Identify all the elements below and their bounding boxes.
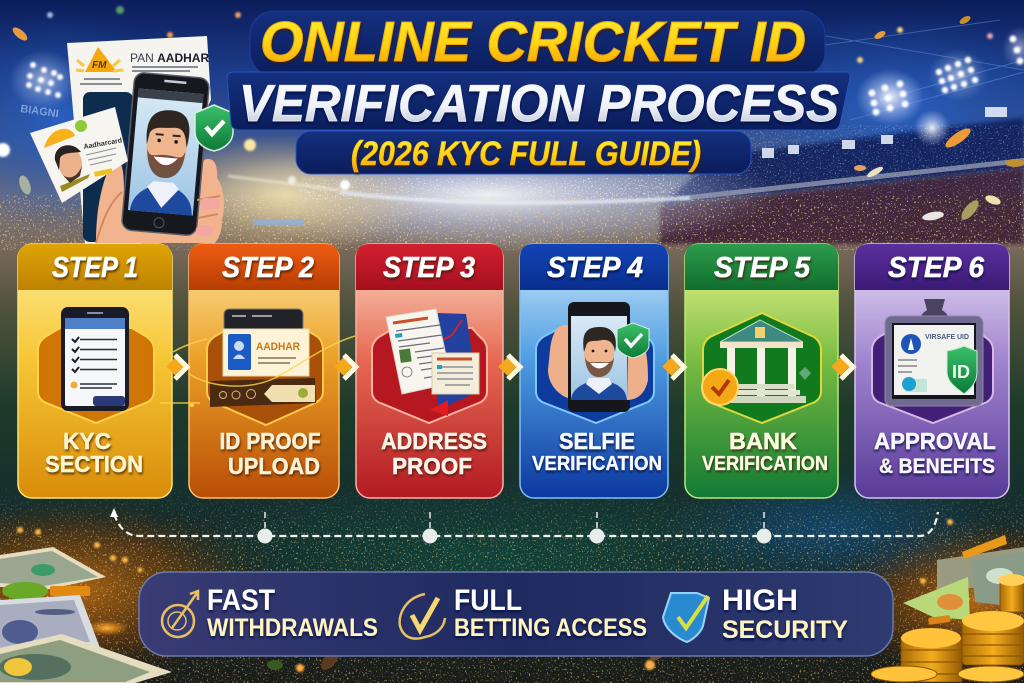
benefit: fast withdrawals: FAST <box>207 584 275 617</box>
panel: step 6 approval and benefits: APPROVAL <box>874 428 996 454</box>
icon: target arrow <box>162 591 198 637</box>
icon: green verified shield <box>195 105 233 151</box>
panel: step 4 selfie verification: VERIFICATION <box>532 453 662 475</box>
arrow: step 4 to 5 <box>662 355 684 379</box>
icon: selfie phone with shield <box>536 302 654 423</box>
arrow: step 5 to 6 <box>831 355 853 379</box>
panel: step 3 address proof: PROOF <box>392 453 472 479</box>
benefit: high security: SECURITY <box>722 616 848 644</box>
gold light streak across cards <box>160 336 355 406</box>
stadium floodlights <box>9 26 1024 125</box>
documents and selfie phone illustration <box>30 36 233 245</box>
title: line one pill: ONLINE CRICKET ID <box>260 10 806 74</box>
icon: check circle <box>400 594 445 639</box>
icon: KYC checklist phone <box>38 307 154 423</box>
arrow: step 1 to 2 <box>166 355 187 379</box>
panel: step 3 address proof: ADDRESS <box>381 428 487 454</box>
arrow: step 2 to 3 <box>334 355 356 379</box>
panel: step 6 approval and benefits: & BENEFITS <box>879 455 995 478</box>
ID card <box>30 107 128 203</box>
benefit: high security: HIGH <box>722 584 798 617</box>
benefit: fast withdrawals: WITHDRAWALS <box>207 614 378 642</box>
icon: hand holding phone <box>96 72 224 243</box>
icon: Aadhar card upload: AADHAR <box>256 341 300 353</box>
sign text in stadium: BIAGNI <box>20 103 59 120</box>
document: PAN and Aadhar sheet: PAN AADHAR <box>130 51 209 65</box>
panel: step 3 address proof: STEP 3 <box>383 252 475 284</box>
panel: step 1 KYC section: KYC <box>63 428 111 454</box>
panel: step 5 bank verification: STEP 5 <box>714 252 811 284</box>
benefit: full betting access <box>400 584 647 642</box>
benefit: full betting access: BETTING ACCESS <box>454 614 647 642</box>
panel: step 6 approval and benefits: STEP 6 <box>888 252 985 284</box>
ID card: Aadharcard <box>83 137 123 151</box>
panel: step 4 selfie verification: STEP 4 <box>547 252 643 284</box>
icon: address documents <box>372 309 487 423</box>
benefit: fast withdrawals <box>162 584 378 642</box>
panel: step 6 approval and benefits <box>855 244 1009 498</box>
panel: step 1 KYC section <box>18 244 172 498</box>
icon: bank building <box>702 313 821 423</box>
money pile left <box>0 547 172 683</box>
benefits bar <box>139 572 893 656</box>
panel: step 3 address proof <box>356 244 503 498</box>
document: PAN and Aadhar sheet: FM <box>92 60 107 71</box>
panel: step 5 bank verification <box>685 244 838 498</box>
panel: step 4 selfie verification: SELFIE <box>559 428 635 454</box>
panel: step 5 bank verification: VERIFICATION <box>702 453 828 475</box>
title: subtitle pill: (2026 KYC FULL GUIDE) <box>351 135 701 173</box>
panel: step 1 KYC section: STEP 1 <box>52 252 138 284</box>
icon: approved ID badge <box>872 299 993 423</box>
panel: step 2 ID proof upload: UPLOAD <box>228 453 320 479</box>
arrow: step 3 to 4 <box>498 355 520 379</box>
panel: step 2 ID proof upload: STEP 2 <box>222 252 314 284</box>
dashed connector timeline <box>110 508 938 544</box>
icon: approved ID badge: VIRSAFE UID <box>925 332 970 341</box>
benefit: full betting access: FULL <box>454 584 522 617</box>
panel: step 2 ID proof upload: ID PROOF <box>220 428 320 454</box>
benefit: high security <box>663 584 848 644</box>
panel: step 5 bank verification: BANK <box>729 428 797 454</box>
icon: Aadhar card upload <box>207 309 323 425</box>
panel: step 1 KYC section: SECTION <box>45 451 143 477</box>
icon: approved ID badge: ID <box>952 362 970 382</box>
panel: step 4 selfie verification <box>520 244 668 498</box>
icon: security shield <box>663 593 709 642</box>
gold coins and cash right <box>871 535 1024 682</box>
panel: step 2 ID proof upload <box>189 244 339 498</box>
title: line two pill: VERIFICATION PROCESS <box>239 75 839 133</box>
document: PAN and Aadhar sheet <box>67 36 211 245</box>
